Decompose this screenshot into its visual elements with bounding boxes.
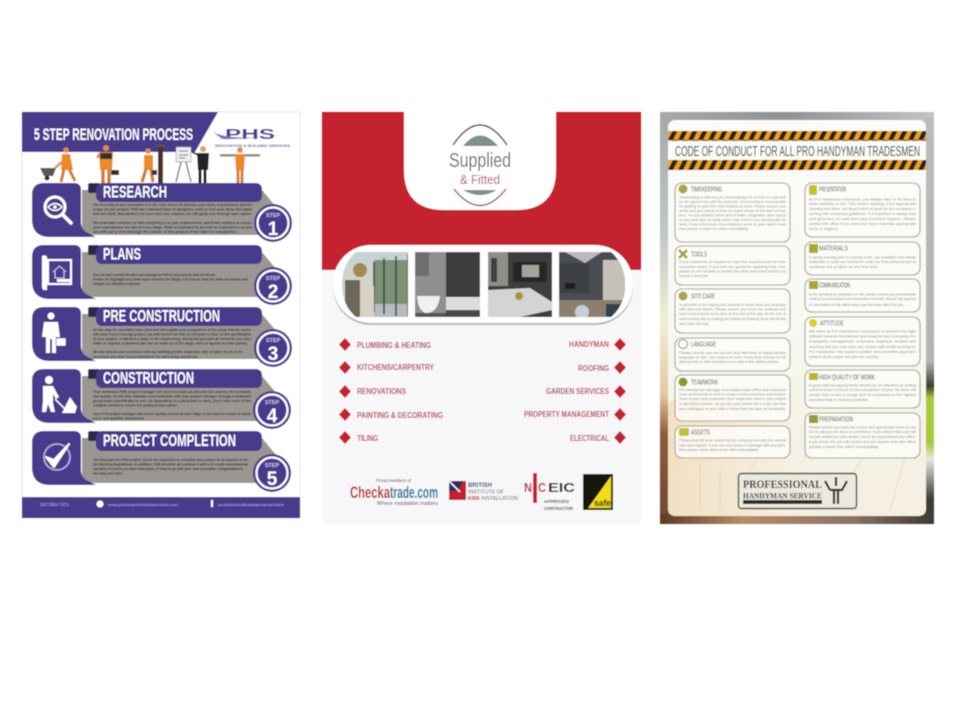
- hazard stripes: [668, 131, 926, 141]
- card: materials: [805, 242, 920, 275]
- body text: Once we have received the plans and drawings for PHS to carry out your work we will ask: [93, 273, 216, 277]
- step 5: project completion: [32, 431, 291, 492]
- heading bar: [96, 245, 262, 264]
- body text: made or request, a planned plan can be made up of the stage, work or agreed for both parties.: [93, 342, 248, 346]
- step badge: 1: [268, 219, 279, 240]
- step badge: [254, 204, 292, 242]
- card: presentation: As Pro Handyman employees, you always have to be clean in: [809, 198, 916, 202]
- card: materials: MATERIALS: [819, 244, 848, 252]
- body text: your expectations are met at every stage. What is important to you will be important to us and: [93, 226, 253, 230]
- logo: british institute of kbb installation: [449, 481, 518, 502]
- card: presentation: clothing and other, not ripped work at work for the company or: [809, 207, 917, 211]
- card: communication: COMMUNICATION: [819, 280, 850, 290]
- card: site care: and clean and tidy.: [679, 322, 709, 326]
- card: preparation: [805, 413, 920, 458]
- logo: checkatrade: trade.com: [390, 483, 438, 502]
- card: site care: work environment every time at the end of the day. At the end of: [679, 312, 786, 316]
- logo: british institute of kbb installation: KBB INSTALLATION: [468, 496, 518, 502]
- card: language: LANGUAGE: [691, 340, 716, 348]
- card: assets: [675, 426, 790, 458]
- card: communication: In the speaking to customers on site, please ensure you communicate: [809, 292, 916, 296]
- card: preparation: Please ensure you have the correct and appropriate items to use: [809, 426, 916, 430]
- logo: niceic approved contractor: N: [524, 480, 532, 495]
- body text: [93, 390, 252, 420]
- step badge: [254, 329, 292, 367]
- card: assets: then please report them to the office immediately.: [679, 448, 759, 452]
- card: site care: with dust and debris. Please ensure you clean the surfaces and: [679, 308, 786, 312]
- card: tools: accept a work job.: [679, 274, 709, 278]
- card: presentation: [805, 183, 920, 237]
- card: teamwork: Work is your best productive your respective work in your project: [679, 397, 786, 401]
- services list: left: PAINTING & DECORATING: [357, 411, 443, 420]
- photo background: [660, 112, 934, 524]
- card: high quality of work: HIGH QUALITY OF WORK: [819, 372, 875, 382]
- card: assets: ASSETS: [691, 428, 710, 436]
- card: attitude: ATTITUDE: [820, 318, 844, 328]
- logo panel: [404, 112, 556, 210]
- logo: checkatrade: Proud members of: [376, 478, 412, 483]
- body text: [92, 328, 252, 359]
- services list: left: RENOVATIONS: [357, 387, 406, 396]
- step badge: STEP: [265, 463, 280, 469]
- card: timekeeping: [675, 183, 790, 242]
- body text: We also discuss and recommend start up, building permits, inspection, time of notice, to you in the: [93, 350, 243, 354]
- card: language: disrespectful to their members or be rude to the visiting visitors.: [679, 360, 779, 364]
- card: tools: TOOLS: [691, 250, 707, 258]
- card: attitude: [805, 317, 920, 366]
- red header: [322, 112, 641, 270]
- PHS logo: PHS: [225, 126, 275, 143]
- logo: gas safe: safe: [594, 498, 611, 508]
- card: teamwork: must communicate to work to create a more productive environment.: [679, 392, 786, 396]
- footer bar: [22, 497, 300, 518]
- logo: gas safe: [583, 474, 613, 510]
- step badge: STEP: [266, 338, 281, 344]
- card: high quality of work: corners when it comes to the completion of jobs. No work will: [809, 388, 916, 392]
- logo: supplied and fitted: Supplied: [449, 150, 511, 172]
- photo strip: [333, 245, 633, 325]
- services list: left: KITCHENS/CARPENTRY: [357, 363, 434, 372]
- card: attitude: We want all Pro Handyman employees to present the right: [809, 330, 916, 334]
- card: timekeeping: arrive and give plenty of time for travel ahead of the start of their: [679, 209, 787, 213]
- card: attitude: anything that you may have any contact with whilst working for: [809, 345, 917, 349]
- card: language: language on site. Use respect at work; every team should not be: [679, 356, 786, 360]
- icon: blueprint: [42, 255, 72, 290]
- step 2: plans: [32, 245, 292, 305]
- step 4: construction: [32, 369, 291, 429]
- card: presentation: items or hygiene.: [809, 227, 839, 231]
- icon: businessman with briefcase: [42, 312, 66, 353]
- icon: check mark: [44, 444, 70, 470]
- step badge: [254, 267, 292, 305]
- photo: glazed doors: [342, 252, 408, 317]
- logo: niceic approved contractor: [524, 473, 576, 512]
- services list: right: GARDEN SERVICES: [546, 387, 609, 396]
- body text: At this step the specialist team meet and will explain your programme of the steps that the works: [93, 328, 251, 332]
- card: presentation: contact the office if you need any move materials appropriate: [809, 222, 916, 226]
- poster: code of conduct: [660, 112, 934, 524]
- card: preparation: for the job you are about to commence. If you believe that a job will: [809, 430, 916, 434]
- card: site care: [675, 289, 790, 333]
- heading bar: [96, 431, 262, 451]
- step badge: [253, 391, 291, 429]
- card: presentation: well groomed, be neat and have excellent hygiene. Please: [809, 217, 916, 221]
- card: timekeeping: for getting to and from that location at work. Please ensure you: [679, 204, 786, 208]
- icon: magnifying glass: [45, 197, 71, 223]
- card: timekeeping: TIMEKEEPING: [691, 184, 722, 194]
- card: attitude: towards all the people and jobs are carrying.: [809, 355, 879, 359]
- logo: niceic approved contractor: APPROVED: [544, 499, 569, 505]
- card: site care: At all times on the staying the customer's home clean and protected: [679, 303, 786, 307]
- card: materials: materials or tools are needed in order for that particular job to: [809, 260, 916, 264]
- card: assets: Please treat all tools owned by the company and with the utmost: [679, 438, 786, 442]
- heading: PRE CONSTRUCTION: [103, 308, 220, 326]
- card: timekeeping: then please contact the office immediately.: [679, 227, 749, 231]
- card: site care: SITE CARE: [691, 292, 715, 300]
- body text: we will carry this through the whole of the project from start to completion.: [92, 230, 238, 234]
- card: materials: A handy working prior to leaving a site, you establish that certain: [809, 256, 916, 260]
- card: presentation: coming with necessary guidelines. It is important to always look: [809, 212, 916, 216]
- body text: group made specifically for you, so depending on a job phase or work, you'll have each of the: [93, 399, 251, 403]
- step 1: research: [32, 183, 292, 242]
- services list: right: HANDYMAN: [569, 340, 609, 349]
- card: language: Please ensure you do not use any offensive or inappropriate: [679, 351, 786, 355]
- body text: UK Building Regulations. In addition, PHS provides all customers with a 12 month workmanship: [93, 462, 249, 466]
- body text: [92, 458, 249, 476]
- card: tools: [675, 246, 790, 285]
- card: site care: each working day by making your tidiest and leaving home with all tidy: [679, 317, 786, 321]
- card: presentation: PRESENTATION: [819, 184, 846, 194]
- card: tools: respective trades. If you have any questions regarding tools, then: [679, 265, 786, 269]
- card: attitude: attitude towards themselves and towards their company, the: [809, 334, 916, 338]
- logo: niceic approved contractor: EIC: [548, 480, 576, 495]
- body text: processes and other issues involved in the work being carried out.: [93, 355, 198, 359]
- logo: checkatrade: Where reputation matters: [377, 501, 439, 507]
- card: high quality of work: standard that is humanly possible.: [809, 398, 869, 402]
- card: preparation: it you know the job will contact the job require from the office: [809, 440, 916, 444]
- logo: british institute of kbb installation: INSTITUTE OF: [468, 490, 505, 496]
- card: assets: care and respect. If you see any issues or damage with any item,: [679, 444, 786, 448]
- title banner: [22, 112, 218, 152]
- body text: scope of your project. PHS has a talented team of designers ready to turn your ideas into plans: [93, 208, 252, 212]
- step badge: STEP: [266, 276, 281, 282]
- card: high quality of work: render from errors or snags and be completed to the highest: [809, 393, 916, 397]
- card: presentation: when working on site. This means wearing of the appropriate: [809, 202, 916, 206]
- logo: supplied and fitted: [449, 125, 511, 206]
- card: tools: please do not hesitate to contact the office and check before you: [679, 270, 786, 274]
- services list: left: PLUMBING & HEATING: [357, 341, 431, 350]
- body text: contacts needed to ensure the quality of each phase.: [93, 404, 178, 408]
- body text: The final part of a PHS project, this is the inspection to complete your project to all aspects of the: [93, 458, 248, 462]
- body text: budgets are officially confirmed.: [93, 282, 141, 286]
- workers illustration: [40, 145, 260, 183]
- poster: supplied and fitted: [322, 112, 641, 524]
- PHS logo: RENOVATION & BUILDING SERVICES: [215, 144, 291, 148]
- card: language: [675, 338, 790, 371]
- logo: niceic approved contractor: CONTRACTOR: [544, 506, 573, 512]
- PHS logo: [213, 126, 291, 148]
- services list: right: PROPERTY MANAGEMENT: [524, 410, 609, 419]
- photo: bathroom: [415, 252, 480, 317]
- card: materials: continue the project on the first time.: [809, 265, 879, 269]
- step 3: pre construction: [32, 307, 292, 367]
- step badge: 2: [268, 282, 278, 303]
- card: timekeeping: work, if any unforeseen circumstances occur on your way to work: [679, 222, 786, 226]
- step badge: STEP: [265, 400, 280, 406]
- body text: that will work. Should there be more than one solution, we will guide you through each option.: [93, 212, 252, 216]
- card: communication: or information to the office when you feel may affect the job.: [809, 303, 904, 307]
- services list: left: TILING: [357, 434, 378, 443]
- card: attitude: Pro Handyman. We expect a positive and committed approach: [809, 350, 916, 354]
- card: teamwork: or with fellow workers. Do you see your partner fall or if you can help: [679, 402, 786, 406]
- card: teamwork: [675, 375, 790, 421]
- card: preparation: PREPARATION: [819, 414, 853, 424]
- body text: We undertake research so that everything is to your requirements, and it will continue to ensure: [93, 221, 252, 225]
- body text: [92, 203, 253, 234]
- body text: The first step in any renovation is a site visit, where we discuss your ideas, requirements and the: [93, 203, 252, 207]
- body text: further to highlight any final requirements for Stage 2 to ensure that the final structural and: [93, 278, 249, 282]
- heading bar: [96, 369, 262, 388]
- services list: left: [339, 338, 443, 444]
- heading bar: [96, 183, 262, 202]
- body text: your set quality standards.: [93, 416, 145, 420]
- services list: right: [524, 338, 626, 444]
- step badge: [253, 454, 291, 492]
- step badge: 3: [268, 344, 278, 365]
- card: communication: what is communicated and completely informed. Report any queries: [809, 297, 916, 301]
- footer bar: 020 3984 7271: [40, 502, 69, 507]
- footer bar: www.primarynorthandservices.com: [108, 502, 179, 507]
- icon: worker with shovel: [42, 376, 77, 413]
- logo: british institute of kbb installation: BRITISH: [468, 483, 492, 489]
- logo: supplied and fitted: & Fitted: [460, 173, 500, 187]
- photo: living room: [559, 252, 625, 319]
- logo: checkatrade: [350, 478, 439, 507]
- card: teamwork: TEAMWORK: [691, 378, 718, 386]
- footer bar: professionalhandymanservice: [218, 502, 285, 507]
- card: timekeeping: Timekeeping is vital and you should always be on time for a job and: [679, 196, 786, 200]
- services list: right: ROOFING: [578, 364, 609, 373]
- card: teamwork: your colleague to your task in times that this also be beneficial.: [679, 407, 786, 411]
- card: teamwork: Pro Handyman strongly encourages team effort and everyone: [679, 388, 786, 392]
- step badge: 4: [267, 406, 278, 427]
- card: communication: [805, 279, 920, 312]
- card: preparation: require additional tools and/or check the appointment the office,: [809, 435, 916, 439]
- card: timekeeping: time. For any situation where lack of traffic, congestion, other issues: [679, 214, 786, 218]
- body text: of your project. It will then a stage of the engineering, during the pre-start all elements you have: [93, 337, 251, 341]
- poster title: 5 STEP RENOVATION PROCESS: [34, 126, 193, 144]
- card: tools: Every tradesman is required to have the required tools for their: [679, 260, 787, 264]
- heading: CONSTRUCTION: [103, 370, 194, 388]
- card: timekeeping: for the agreed time with the customer. Overrunning is unacceptable: [679, 200, 786, 204]
- card: high quality of work: It goes without saying there should be an intention of cutting: [809, 384, 916, 388]
- logo: professional handyman service: PROFESSIONAL: [743, 477, 822, 491]
- body text: warranty to ensure you have total peace of mind to go with your new renovation. Congratulations: [92, 467, 243, 471]
- step badge: 5: [267, 469, 278, 490]
- heading: RESEARCH: [103, 184, 167, 202]
- card: timekeeping: or any other type of delay which may result in you arriving late for: [679, 218, 787, 222]
- body text: Your dedicated PHS project manager will meet the team on site and will oversee the schedule: [93, 390, 251, 394]
- body text: Your PHS project manager will ensure quality checks at each stage of the work to ensure it meets: [93, 412, 251, 416]
- heading bar: [96, 307, 262, 326]
- step badge: STEP: [266, 213, 281, 219]
- heading: PROJECT COMPLETION: [103, 432, 236, 450]
- body text: and quality. He will also maintain communication with your project manager through a dedicated: [93, 394, 252, 398]
- card: high quality of work: [805, 370, 920, 408]
- content panel: [668, 120, 926, 516]
- logo: checkatrade: Checka: [350, 483, 390, 502]
- logo: niceic approved contractor: C: [538, 480, 547, 495]
- logo: professional handyman service: HANDYMAN SERVICE: [743, 490, 822, 500]
- body text: [93, 273, 249, 286]
- card: preparation: please contact the office immediately.: [809, 445, 879, 449]
- body text: will move from a concept project, you will receive our bid, so everyone is clear on the specification: [92, 332, 252, 336]
- poster: 5 step renovation process: [22, 112, 300, 518]
- heading: PLANS: [103, 246, 141, 264]
- services list: right: ELECTRICAL: [570, 434, 609, 443]
- photo: kitchen: [488, 252, 552, 317]
- body text: and enjoy your home.: [93, 472, 123, 476]
- card: attitude: employees, management, customers, suppliers, vendors and: [809, 340, 916, 344]
- logo: professional handyman service: [738, 474, 856, 508]
